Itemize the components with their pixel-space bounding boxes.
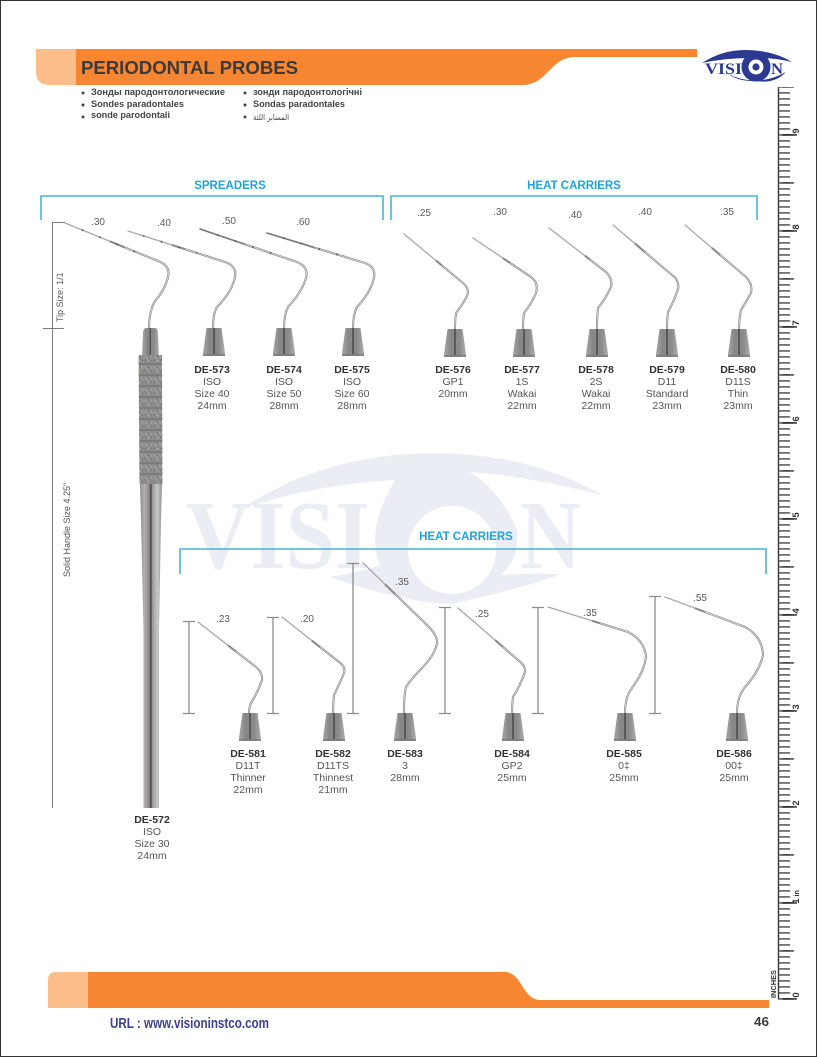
- label: DE-574: ISO: [275, 376, 293, 388]
- label: DE-578: 22mm: [581, 400, 611, 412]
- watermark logo: VISI: [186, 482, 370, 590]
- size: .60: .60: [296, 217, 310, 228]
- label: DE-579: DE-579: [649, 364, 685, 376]
- label: DE-580: D11S: [725, 376, 751, 388]
- instrument: DE-580: [685, 225, 751, 357]
- label: DE-578: 2S: [590, 376, 602, 388]
- label: DE-576: DE-576: [435, 364, 471, 376]
- label: DE-580: DE-580: [720, 364, 756, 376]
- label: DE-574: DE-574: [266, 364, 302, 376]
- size: .50: .50: [222, 216, 236, 227]
- label: DE-577: [504, 364, 540, 412]
- label: DE-573: Size 40: [194, 388, 230, 400]
- dimension: DE-581: [183, 621, 195, 714]
- size: .55: .55: [693, 593, 707, 604]
- inch ruler: 8: [791, 224, 802, 230]
- translations list: Sondes paradontales: [91, 99, 184, 109]
- dimension: tip and handle size: Solid Handle Size 4.25": [62, 483, 72, 577]
- instrument: DE-585: [548, 607, 646, 741]
- heading: heat carriers bottom: HEAT CARRIERS: [419, 531, 513, 543]
- size: .30: .30: [91, 217, 105, 228]
- dimension: DE-585: [532, 607, 544, 714]
- translations list: Sondas paradontales: [253, 99, 345, 109]
- inch ruler: 1 in: [791, 890, 802, 904]
- label: DE-581: DE-581: [230, 748, 266, 760]
- label: DE-583: [387, 748, 423, 784]
- size: .35: .35: [720, 207, 734, 218]
- instrument: DE-578: [549, 228, 611, 357]
- inch ruler: 7: [791, 320, 802, 326]
- size: .40: .40: [638, 207, 652, 218]
- label: DE-580: Thin: [728, 388, 748, 400]
- label: DE-574: [266, 364, 302, 412]
- label: DE-584: [494, 748, 530, 784]
- translations list: Зонды пародонтологические: [91, 87, 225, 97]
- label: DE-583: 3: [402, 760, 408, 772]
- heading: heat carriers top: HEAT CARRIERS: [527, 180, 621, 192]
- translations list: [82, 87, 362, 122]
- dimension: tip and handle size: Tip Size: 1/1: [55, 272, 65, 322]
- label: DE-586: DE-586: [716, 748, 752, 760]
- label: DE-579: [646, 364, 688, 412]
- instrument: DE-574: [200, 229, 307, 356]
- vision logo: [702, 50, 792, 82]
- label: DE-575: Size 60: [334, 388, 370, 400]
- dimension: DE-583: [347, 563, 359, 714]
- instrument: DE-584: [458, 608, 525, 741]
- label: DE-581: [230, 748, 266, 796]
- label: DE-585: 0‡: [618, 760, 630, 772]
- label: DE-572: 24mm: [137, 850, 167, 862]
- label: DE-576: [435, 364, 471, 400]
- label: DE-578: DE-578: [578, 364, 614, 376]
- label: DE-572: ISO: [143, 826, 161, 838]
- inch ruler: 6: [791, 416, 802, 422]
- label: DE-584: GP2: [501, 760, 523, 772]
- dimension: DE-586: [649, 596, 661, 714]
- label: DE-582: [313, 748, 353, 796]
- size: .20: .20: [300, 614, 314, 625]
- label: DE-581: Thinner: [230, 772, 266, 784]
- label: DE-582: Thinnest: [313, 772, 353, 784]
- size: .25: .25: [417, 208, 431, 219]
- label: DE-578: Wakai: [582, 388, 610, 400]
- label: DE-582: DE-582: [315, 748, 351, 760]
- vision logo: VISI: [705, 61, 742, 78]
- instrument: DE-581: [198, 622, 262, 741]
- inch ruler: 2: [791, 800, 802, 806]
- label: DE-584: 25mm: [497, 772, 527, 784]
- label: DE-583: 28mm: [390, 772, 420, 784]
- label: DE-577: 1S: [516, 376, 528, 388]
- label: DE-580: 23mm: [723, 400, 753, 412]
- label: DE-580: [720, 364, 756, 412]
- inch ruler: 9: [791, 128, 802, 134]
- label: DE-581: D11T: [236, 760, 261, 772]
- label: DE-579: D11: [658, 376, 676, 388]
- label: DE-576: 20mm: [438, 388, 468, 400]
- label: DE-575: [334, 364, 370, 412]
- dimension: tip and handle size: [43, 222, 72, 808]
- label: DE-573: ISO: [203, 376, 221, 388]
- label: DE-575: ISO: [343, 376, 361, 388]
- size: .40: .40: [568, 210, 582, 221]
- bracket: spreaders: [41, 196, 383, 220]
- heading: spreaders: SPREADERS: [194, 180, 266, 192]
- translations list: المسابر اللثة: [253, 113, 289, 122]
- label: DE-572: DE-572: [134, 814, 170, 826]
- label: DE-573: DE-573: [194, 364, 230, 376]
- label: DE-586: 25mm: [719, 772, 749, 784]
- label: DE-585: 25mm: [609, 772, 639, 784]
- instrument: DE-576: [404, 234, 468, 357]
- label: DE-577: Wakai: [508, 388, 536, 400]
- label: DE-576: GP1: [442, 376, 464, 388]
- watermark logo: N: [520, 482, 581, 590]
- label: DE-579: 23mm: [652, 400, 682, 412]
- label: DE-582: D11TS: [317, 760, 349, 772]
- label: DE-573: 24mm: [197, 400, 227, 412]
- size: .35: .35: [395, 577, 409, 588]
- instrument: DE-582: [282, 617, 345, 741]
- inch ruler: 0: [791, 992, 802, 998]
- label: DE-578: [578, 364, 614, 412]
- size: .25: .25: [475, 609, 489, 620]
- size: .23: .23: [216, 614, 230, 625]
- title: PERIODONTAL PROBES: [81, 57, 298, 78]
- watermark logo: [186, 453, 602, 604]
- label: DE-585: [606, 748, 642, 784]
- label: DE-574: 28mm: [269, 400, 299, 412]
- label: DE-572: Size 30: [134, 838, 170, 850]
- instrument: DE-579: [613, 225, 678, 357]
- inch ruler: 4: [791, 608, 802, 614]
- label: DE-574: Size 50: [266, 388, 302, 400]
- label: DE-577: DE-577: [504, 364, 540, 376]
- header band: [36, 49, 697, 85]
- size: .35: .35: [583, 608, 597, 619]
- label: DE-584: DE-584: [494, 748, 530, 760]
- instrument: DE-575: [267, 233, 374, 356]
- label: DE-586: [716, 748, 752, 784]
- dimension: DE-582: [267, 617, 279, 714]
- label: DE-582: 21mm: [318, 784, 348, 796]
- inch ruler: 3: [791, 704, 802, 710]
- footer band: [48, 972, 769, 1008]
- inch ruler: INCHES: [769, 970, 778, 998]
- label: DE-573: [194, 364, 230, 412]
- footer url: URL : www.visioninstco.com: [110, 1015, 269, 1032]
- label: DE-583: DE-583: [387, 748, 423, 760]
- vision logo: N: [771, 61, 783, 78]
- translations list: зонди пародонтологічні: [253, 87, 362, 97]
- instrument: DE-572: [65, 223, 169, 808]
- label: DE-579: Standard: [646, 388, 688, 400]
- label: DE-572: [134, 814, 170, 862]
- label: DE-577: 22mm: [507, 400, 537, 412]
- label: DE-585: DE-585: [606, 748, 642, 760]
- instrument: DE-573: [128, 231, 235, 356]
- page number: 46: [754, 1014, 769, 1029]
- label: DE-581: 22mm: [233, 784, 263, 796]
- label: DE-575: DE-575: [334, 364, 370, 376]
- size: .40: .40: [157, 218, 171, 229]
- size: .30: .30: [493, 207, 507, 218]
- dimension: DE-584: [439, 607, 451, 714]
- instrument: DE-586: [665, 597, 763, 741]
- inch ruler: 5: [791, 512, 802, 518]
- instrument: DE-583: [363, 563, 437, 741]
- label: DE-575: 28mm: [337, 400, 367, 412]
- bracket: heat carriers bottom: [180, 549, 766, 574]
- instrument: DE-577: [473, 238, 537, 357]
- bracket: heat carriers top: [391, 196, 757, 220]
- inch ruler: [769, 87, 802, 1000]
- translations list: sonde parodontali: [91, 110, 170, 120]
- label: DE-586: 00‡: [725, 760, 743, 772]
